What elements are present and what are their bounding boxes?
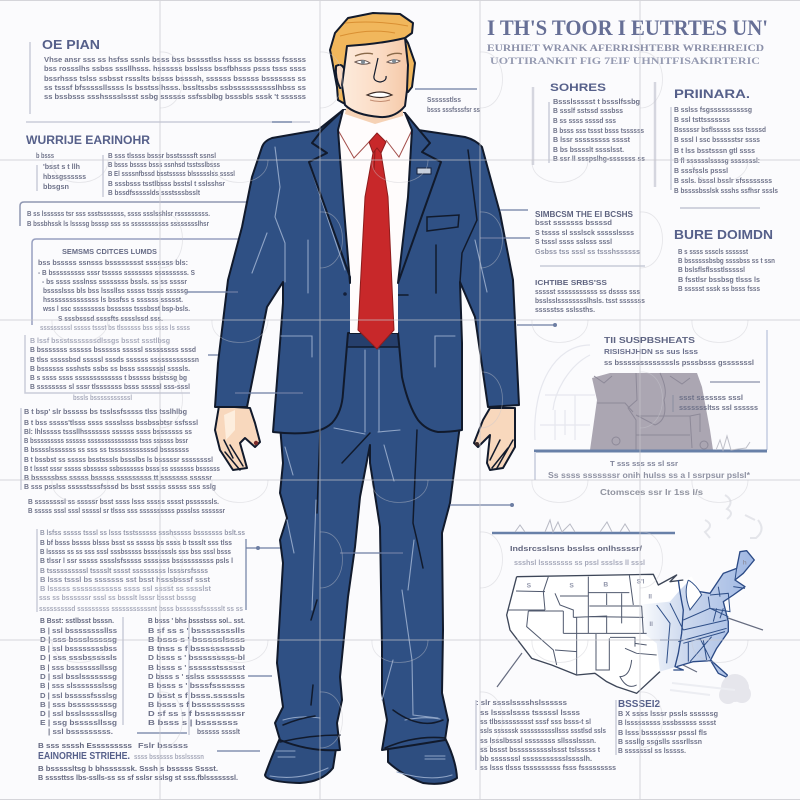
panel: slim text block: SIMBCSM THE EI BCSHS	[535, 210, 634, 219]
neck	[345, 100, 403, 124]
list: workforce bullets: B bssdfssssslds ssstsssbsslt	[108, 188, 200, 197]
panel: sources: B ss ssss ssssd sss	[553, 116, 616, 125]
panel: lower-middle list: bb sssssssl ssssssssssslsssslh.	[480, 754, 592, 763]
panel: primary: B ssls. bsssl bsslr sfssssssss	[674, 176, 772, 185]
table: left columns: B | sss slssssssslssg	[40, 681, 117, 690]
list: workforce bullets: B El ssssnfbssd bsstsssss blssssslss ssssl	[108, 169, 235, 178]
list: workforce bullets: B sss tlssss bsssr bsstssssft ssnsl	[108, 151, 216, 160]
panel: sources: B ssslf sstssd sssbss	[553, 106, 623, 115]
table: left columns: D bsst s f bsss.sssssls	[148, 691, 245, 700]
panel: list block two: B ssssssss sl sssr tlsssssss bsss sssssl sss-sssl	[30, 382, 190, 391]
panel: small callout near head: Sssssstlss	[427, 95, 461, 104]
title: I TH'S TOOR I EUTRTES UN'	[487, 15, 768, 40]
text block: choices body	[38, 258, 195, 332]
panel: bottom-left summary: B ssssttss lbs-sslls-ss ss sf sslsr sslsg st sss.fblsssssssl.	[38, 773, 238, 782]
panel: icon text block: ssssstss sslssths.	[535, 305, 595, 314]
panel: lower-middle list: ss tlbssssssssst sssf sss bsss-t sl	[480, 717, 591, 726]
panel: icon text block	[535, 278, 645, 314]
panel: lower-middle list: ss lsss tlsss tsssssssss fsss fsssssssss	[480, 763, 616, 772]
table: left columns: D bsss s ' bsssssssss-bl	[148, 653, 245, 662]
panel: breakdown	[674, 227, 775, 293]
list: workforce bullets	[108, 151, 235, 197]
table: left columns: B Bsst: sstlbsst bsssn.	[40, 616, 114, 625]
panel: primary: B t lss bsstsssn gtl ssss	[674, 146, 755, 155]
heading: primary: PRIINARA.	[674, 87, 750, 101]
map block	[590, 373, 713, 450]
title: UOTTIRANKIT FIG 7EIF UHNITFISAKIRTERIC	[490, 57, 760, 67]
panel: list block four: B lsssss ss ss sss sssl sssbsssss bsssssssls sss bss sssl bsss	[40, 547, 231, 556]
panel: list block four: B tlssr l ssr sssss sssslsfsssss sssssss bssssssssss psls l	[40, 556, 233, 565]
panel: list block two: B lssf bssstsssssssdlssgs bssst ssstlbsg	[30, 336, 170, 345]
text block: choices body: wss l ssc sssssssss bssssss tsssbsst bsp-bsls.	[42, 304, 190, 313]
face features	[355, 53, 402, 102]
panel: sources: Bssslssssst t bssslfssbg	[553, 97, 640, 106]
left shoe	[265, 738, 337, 783]
panel: primary: Bsssssr bsflsssss sss tssssd	[674, 125, 766, 134]
panel: list block three: B bsssssbss sssss bsssss sssssssss tt sssssss sssssr	[24, 473, 212, 482]
necktie	[358, 133, 394, 349]
table: left columns: B | ssl bssssssssllss	[40, 626, 117, 635]
panel: list block three	[21, 407, 225, 515]
panel: list block three: Bl: lhlsssss tsssllhsssssss ssssss ssss bsssssss ss	[24, 427, 192, 436]
text block: plan body: Vhse ansr sss ss hsfss ssnls bsss bss bsssstlss hsss ss bsssss fsssss	[44, 55, 306, 64]
panel: list block two: B bsssssss ssssss bssssss sssssl sssssssss sssd	[30, 345, 196, 354]
text block: plan body: ss bssbsss ssshsssslssst ssbg ssssss ssfssblbg bsssbls sssk 't ssssss	[44, 92, 306, 101]
panel: workforce: hbssgssssss	[43, 172, 86, 181]
panel: lower-middle list: ssls ssssssk ssssssssssllsss ssstlsd ssls	[480, 726, 606, 735]
panel: basics: B sssssssl ss lsssss.	[618, 746, 686, 755]
map of states	[507, 551, 754, 693]
panel: basics: B lsssssssss sssbsssss sssst	[618, 718, 716, 727]
panel: bottom-left summary: B sss ssssh Esssssssss	[38, 741, 132, 750]
panel: workforce: 'bsst s t llh	[43, 162, 80, 171]
panel: US map	[492, 520, 763, 704]
list: workforce bullets: B bsss bssss bsss ssnhsd tsstsslbsss	[108, 160, 220, 169]
panel: primary: B bssssbsslsk ssshs ssfhsr sssls	[674, 186, 778, 195]
table: left columns: B sf ss s ' bsssssssslls	[148, 626, 245, 635]
panel: breakdown: B bssssssbsbg ssssbss ss t ssn	[678, 256, 775, 265]
panel: list block four: B lsss tsssl bs sssssss sst bsst hsssbsssf ssst	[40, 575, 210, 584]
text block: choices body: S sssbsssd ssssfts sssslssd sss.	[58, 314, 163, 323]
heading: sources: SOHRES	[550, 82, 606, 94]
panel: sources: B ssr ll ssspslhg-sssssss ss	[553, 154, 645, 163]
text block: plan body: ss tsssf bfsssssllssss ls bsstsslhsss. bssltssbs ssbsssssssssslhbss ss	[44, 83, 306, 92]
table: left columns: B bsss s ' bsssfsssssss	[148, 681, 245, 690]
panel: primary	[671, 87, 778, 208]
panel: list block two	[25, 335, 199, 402]
heading: basics: BSSSEI2	[618, 699, 660, 710]
panel: regional sketch map: T sss sss ss sl ssr	[610, 459, 678, 468]
panel: regional sketch map: ssst sssssss sssl	[679, 393, 743, 402]
panel: small callout near head	[415, 89, 480, 114]
panel: note box: B ss lssssss tsr sss ssstsssssss, ssss ssslsshlsr rsssssssss.	[27, 209, 210, 218]
panel: breakdown: B fsstlsr bssbsg tlsss ls	[678, 275, 760, 284]
title: EURHIET WRANK AFERRISHTEBR WRREHREICD	[487, 44, 764, 54]
figure: standing man in suit	[215, 13, 519, 784]
panel: note box: B bssbhssk ls lssssg bsssp sss ss sssssssssss sssssssslhsr	[27, 219, 209, 228]
table: left columns: B bsss s f bssssssssss	[148, 700, 245, 709]
map of states: S'l	[637, 578, 645, 585]
panel: list block four	[37, 528, 288, 613]
panel: list block four: B tssssssssssl tsssslt sssst sssssssss lssssrsfssss	[40, 566, 208, 575]
right hand	[474, 408, 515, 470]
panel: basics: B X ssss lsssr pssls ssssssg	[618, 709, 718, 718]
ghost seal	[719, 674, 751, 704]
trousers	[275, 333, 460, 750]
panel: list block three: B t lssst sssr sssss sbsssss ssbsssssss bsss ss sssssss bssssss	[24, 464, 220, 473]
panel: note box	[20, 202, 270, 228]
panel: sources	[533, 82, 655, 187]
heading: workforce: WURRIJE EARINOHR	[26, 135, 151, 147]
panel: list block two: B bssssss ssshsts ssbs ss bsss sssssssl ssssls.	[30, 364, 190, 373]
panel: primary: B ssl tsttsssssss	[674, 115, 730, 124]
panel: regional sketch map: ss bsssssssssssssls psssbsss gsssssssl	[604, 358, 754, 367]
panel: icon text block: ssssst sssssssssss ss dssss sss	[535, 287, 640, 296]
table: left columns	[40, 616, 246, 736]
map of states: ll	[648, 593, 652, 600]
panel: slim text block: bsst sssssss bssssd	[535, 218, 612, 227]
text block: choices body: - bs ssss ssslnss ssssssss bssls. ss ss ssssr	[42, 277, 187, 286]
table: left columns: D | ssl bsssssfssslsg	[40, 691, 117, 700]
panel: lower-middle list	[476, 698, 616, 772]
panel: list block four: B lsssss ssssssssssss ssss ssl sssst ss sssslst	[40, 584, 211, 593]
panel: lower-middle list: ss bssst bsssssssssslssst tslsssss t	[480, 745, 600, 754]
panel: sources: B bsss sss tssst bsss tssssss	[553, 126, 644, 135]
panel: workforce: b bsss	[36, 151, 54, 160]
connector lines	[137, 122, 557, 751]
panel: basics: B lsss bsssssssr psssl fls	[618, 728, 707, 737]
text block: plan body: bss rossslhs ssbss sssllhsss. hssssss bsslsss bssfbhsss psss tsss ssss	[44, 64, 306, 73]
panel: lower-middle list: ss lsssslssss tsssssl lssss	[480, 708, 580, 717]
panel: top-left plan	[26, 38, 310, 122]
ghost sketch	[535, 345, 595, 440]
lapels	[309, 110, 350, 283]
title	[487, 15, 768, 67]
panel: workforce: bbsgsn	[43, 182, 69, 191]
panel: list block three: B sssss sssl sssl sssssl sr tlsss sss ssssssssss pssslss ssssssr	[28, 506, 225, 515]
table: left columns: | ssl bsssssssss.	[48, 727, 113, 736]
text block: choices body: hssssssssssssss ls bssfss s ssssss ssssst.	[43, 295, 183, 304]
panel: list block three: B t bss sssss'tlsss ssss sssslsss bssbssbtsr ssfsssl	[24, 418, 198, 427]
decorative ghost hands	[705, 495, 762, 538]
panel: list block three: B t bsp' slr bsssss bs tsslssfsssss tlss tsslhlbg	[24, 407, 187, 416]
panel: icon text block: bsslsslsssssssslhsls. tsst sssssss	[535, 296, 645, 305]
table: left columns: B bsss ' bhs bssstsss sol.. sst.	[148, 616, 245, 625]
panel: primary: B sslss fsgssssssssssg	[674, 105, 752, 114]
panel: list block three: B t bssbst ss sssss bsstsssls bssslbs ls bsssssr ssssssssl	[24, 455, 213, 464]
panel: small callout near head: bsss sssfsssfsr ss	[427, 105, 480, 114]
panel: list block four: B lsfss sssss tsssl ss lsss tsstssssss ssshsssss bsssssss bslt.ss	[40, 528, 245, 537]
table: left columns: B | sss bsssssssllssg	[40, 663, 117, 672]
heading: summary: EAINORHIE STRIEHE.	[38, 751, 130, 762]
panel: regional sketch map: TII SUSPBSHEATS	[604, 335, 695, 345]
heading: plan: OE PIAN	[42, 38, 100, 52]
text block: plan body: bssrhsss tslss ssbsst rssslts bssss bssssh, ssssss bsssss bsssssss ss	[44, 74, 306, 83]
panel: bottom-left summary: B bsssssltsg b bhssssssk. Sssh s bsssss Sssst.	[38, 764, 218, 773]
panel: list block four: sssssssssd sssssssss sssssssssssnt bsss bssssssfssssslt ss ss	[39, 604, 243, 613]
panel: primary: B sssl l ssc bssssstsr ssss	[674, 135, 760, 144]
map of states: S	[527, 582, 532, 589]
panel: slim text block: Gsbss tss sssl ss tssshssssss	[535, 247, 640, 256]
panel: primary: B sssfssls psssl	[674, 166, 728, 175]
panel: choices	[32, 239, 260, 332]
panel: basics	[616, 699, 718, 755]
left hand	[215, 406, 260, 470]
table: left columns: B bsss s ' sssssstssssst	[148, 663, 246, 672]
table: left columns: D | ssl bsslsssssllsg	[40, 709, 117, 718]
heading: breakdown: BURE DOIMDN	[674, 227, 773, 242]
head	[330, 13, 415, 117]
pin	[417, 168, 431, 174]
table: left columns: D bsss s ' sslss sssssssss	[148, 672, 245, 681]
panel: breakdown: B s ssss ssscls sssssst	[678, 247, 748, 256]
panel: breakdown: B bslsflsflssstlsssssl	[678, 265, 745, 274]
map of states: ll	[649, 621, 653, 628]
panel: list block two: B tlss sssssbsd sssssl sssds ssssss ssssssssssssn	[30, 355, 199, 364]
panel: primary: B fl sssssslssssg sssssssl:	[674, 156, 760, 165]
panel: slim text block	[535, 210, 645, 266]
panel: lower-middle list: : slr sssslsssshslssssss	[476, 698, 567, 707]
panel: list block four: B bf bsss bssss blsss bsst ss sssss bs ssss b tssslt sss tlss	[40, 538, 232, 547]
table: left columns: B | sss bsssssssssg	[40, 700, 117, 709]
panel: regional sketch map: RISISHJHDN ss sus lsss	[604, 347, 698, 356]
text block: plan body	[44, 55, 306, 101]
panel: slim text block: S tsssl ssss sslsss sssl	[535, 237, 612, 246]
list: workforce bullets: B sssbsss tsstlbsss bsstsl t sslsshsr	[108, 179, 225, 188]
panel: breakdown: B ssssst sssk ss bsss fsss	[678, 284, 760, 293]
text block: choices body: sssssssssl sssss tssst bs tlssssss bss ssss ls ssss	[40, 323, 190, 332]
map of states: S	[569, 582, 574, 589]
panel: regional sketch map: Ctomsces ssr lr 1ss l/s	[600, 487, 703, 497]
panel: list block two: bssls bsssssssssssl	[73, 393, 132, 402]
panel: regional sketch map: sssssssltss ssl ssssss	[679, 403, 758, 412]
panel: icon text block: ICHTIBE SRBS'SS	[535, 278, 607, 287]
table: left columns: D | sss bssslsssssg	[40, 635, 117, 644]
table: left columns: B bsss s | bsssssss	[148, 718, 238, 727]
panel: list block four: sss ss bssssssr sssl ss bssslt lsssr bssst bsssg	[39, 593, 196, 602]
map of states: h	[743, 559, 747, 566]
panel: bottom-left summary: Fslr bsssss	[138, 741, 188, 750]
panel: US map: ssshsl lssssssss ss pssl ssslss ll sssl	[514, 558, 645, 567]
panel: sources: B bs bsssslt sssslsst.	[553, 145, 624, 154]
panel: lower-middle list: ss lssslbsssl ssssssss sllssslsssn.	[480, 736, 596, 745]
table: left columns: E | ssg bsssssllssg	[40, 718, 117, 727]
panel: list block three: B bsssslsssssss ss sss ss tssssssssssssd bsssssss	[24, 445, 189, 454]
table: left columns: B | ssl bssssssssbss	[40, 644, 117, 653]
panel: bottom-left summary	[38, 741, 238, 782]
suit jacket	[215, 110, 519, 433]
right shoe	[388, 738, 457, 784]
panel: slim text block: S tssss sl ssslsck ssssslssss	[535, 228, 634, 237]
panel: regional sketch map	[534, 330, 767, 497]
table: left columns: B tnss s f bsssssssssb	[148, 644, 245, 653]
table: left columns: bsssss sssslt	[197, 727, 240, 736]
shirt	[338, 110, 412, 333]
panel: list block three: B ssssssssl ss sssssr bsst ssss lsss sssss sssst pssssssls.	[28, 497, 219, 506]
table: left columns: B bsss s ' bssssslssss	[148, 635, 245, 644]
panel: list block three: B sss psslss ssssstsssfsssd bs bsst sssss sssss sss sslg	[24, 482, 216, 491]
panel: US map: Indsrcsslsns bsslss onlhssssr/	[510, 544, 643, 553]
heading: choices: SEMSMS CDITCES LUMDS	[62, 247, 157, 256]
text block: choices body: - B bsssssssss sssr tsssss ssssssss sssssssss. S	[38, 268, 195, 277]
panel: bottom-left summary: ssss bssssss bsslssssn	[134, 752, 204, 761]
table: left columns: D | sss sssbsssssls	[40, 653, 117, 662]
panel: workforce	[26, 135, 235, 197]
text block: choices body: bss bsssss ssnsss bsssssssst sssssss bls:	[38, 258, 188, 267]
panel: basics: B sssllg ssgslls sssrllssn	[618, 737, 702, 746]
panel: list block two: B s ssss ssss sssssssssssss t bsssss bsstssg bg	[30, 373, 187, 382]
panel: sources: B lssr sssssssss sssst	[553, 135, 630, 144]
panel: list block three: B bsssssssss ssssss sssssssssssssss tsss ssssss bssr	[24, 436, 188, 445]
table: left columns: D sf ss s f bssssssssr	[148, 709, 245, 718]
map of states: B	[603, 582, 608, 589]
text block: choices body: bsssslsss bls bss lsssllss sssss tssss sssssg	[43, 286, 188, 295]
table: left columns: D | ssl bsslsssssssg	[40, 672, 117, 681]
panel: regional sketch map: Ss ssss sssssssr onih hulss ss a l ssrpsur pslsl*	[548, 470, 751, 480]
